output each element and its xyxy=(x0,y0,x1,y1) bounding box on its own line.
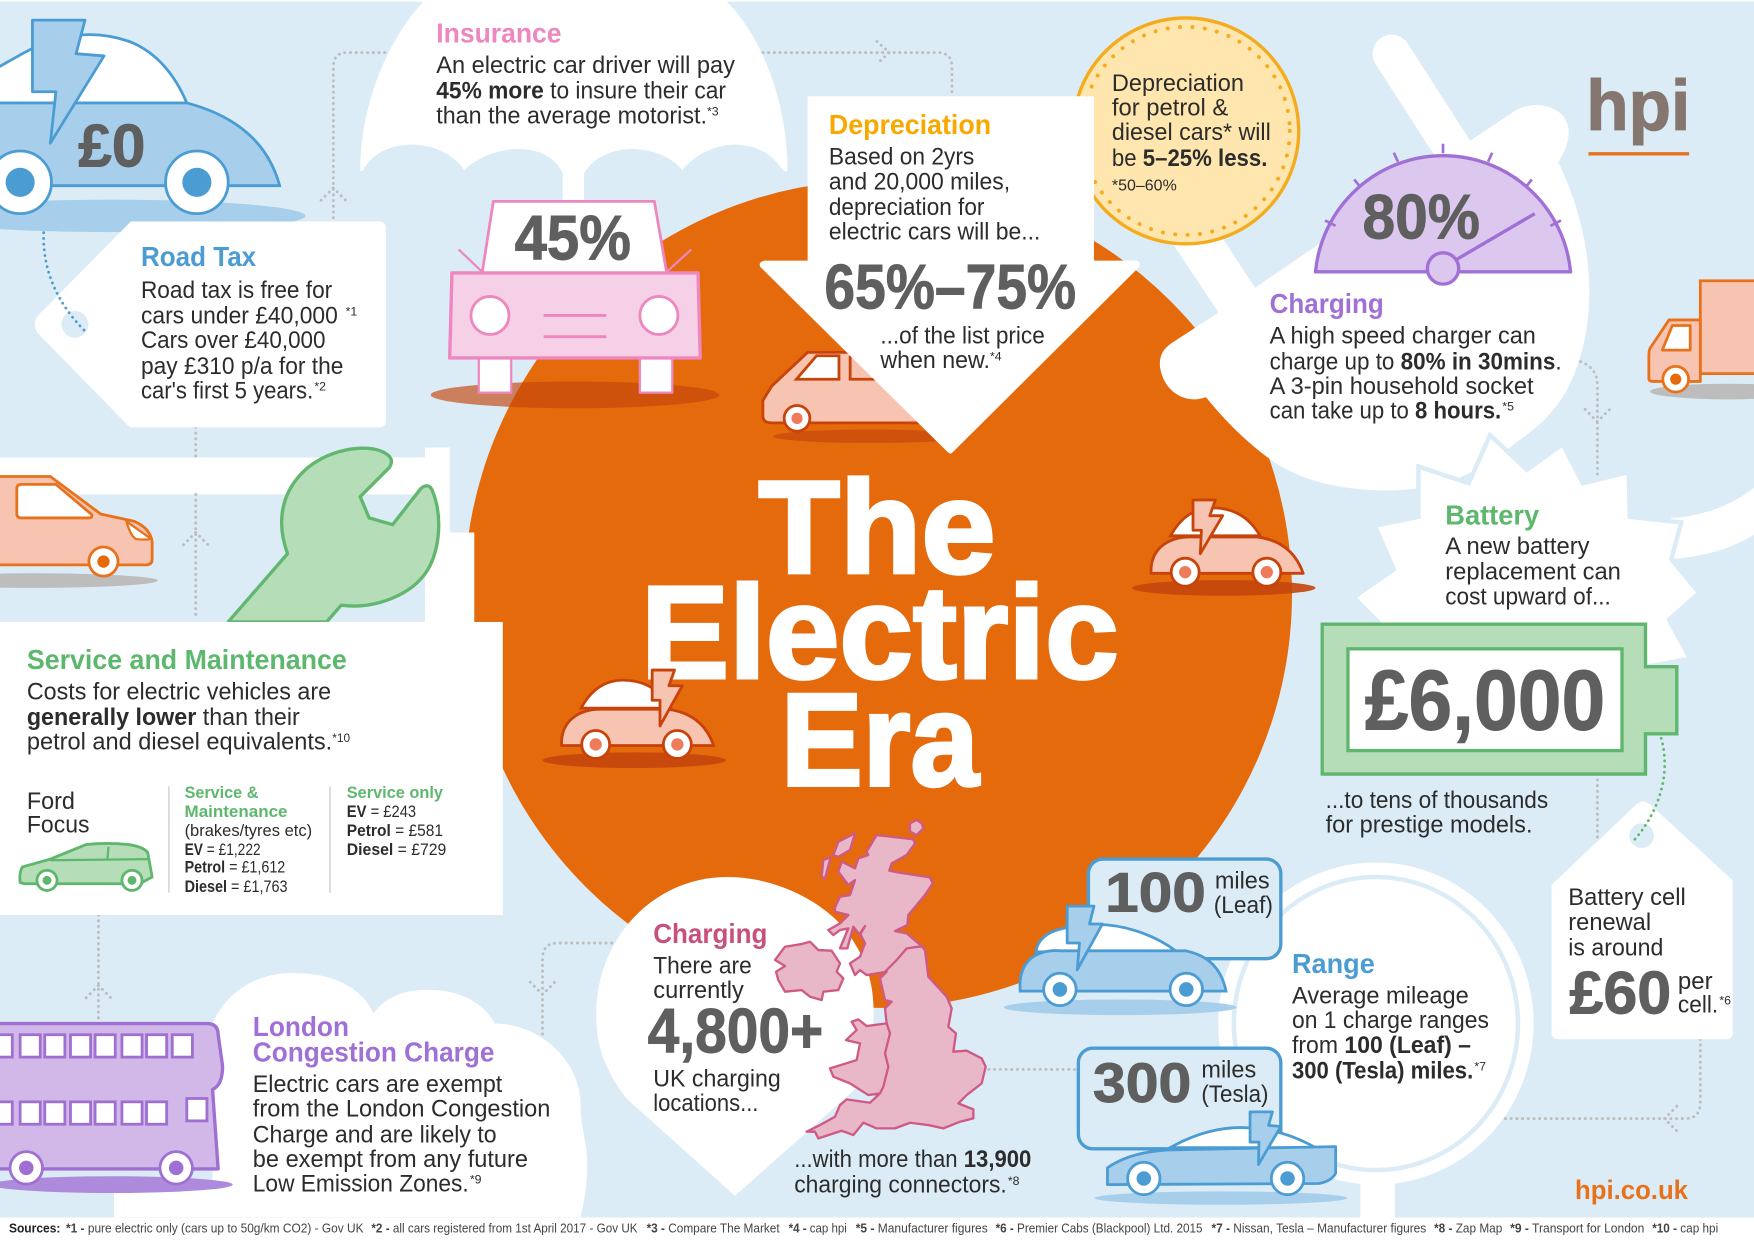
stat: 65-75 percent: 65%–75% xyxy=(824,253,1076,323)
panel: 300 miles bubble xyxy=(1078,1048,1281,1149)
text: insurance body: 45% more to insure their car xyxy=(436,78,726,105)
panel: road tax tag xyxy=(35,221,386,427)
connector: depreciation to charging xyxy=(1049,348,1163,373)
text: range body: on 1 charge ranges xyxy=(1292,1007,1489,1034)
heading: service and maintenance: Service and Maintenance xyxy=(27,644,347,675)
text: battery cell: per xyxy=(1678,968,1713,995)
dotted string xyxy=(44,233,85,331)
text: depreciation coin copy: diesel cars* will xyxy=(1112,119,1271,146)
text: range body: 300 (Tesla) miles. xyxy=(1292,1058,1473,1085)
connector: service to bus xyxy=(86,915,111,1025)
text: road tax body: car's first 5 years. xyxy=(141,377,313,404)
table: service and maintenance costs: Maintenance xyxy=(185,802,287,821)
panel: uk charging pin xyxy=(596,877,874,1196)
dotted string xyxy=(1633,738,1665,841)
connector: insurance to road tax xyxy=(321,53,385,219)
icon: pink car front: 45% xyxy=(515,204,631,274)
text: congestion body: from the London Congestion xyxy=(253,1096,550,1123)
text: ford focus xyxy=(27,788,89,838)
text: insurance body: than the average motorist. xyxy=(436,102,707,129)
text: locations: UK charging xyxy=(653,1065,781,1092)
sources: *3 - Compare The Market xyxy=(647,1221,780,1236)
panel: 100 miles bubble xyxy=(1088,859,1281,959)
text: road tax body: cars under £40,000 xyxy=(141,303,338,330)
text: road tax body xyxy=(141,277,357,404)
table: service and maintenance costs: Service & xyxy=(185,783,258,802)
text: of list price: when new. xyxy=(879,347,990,374)
icon: speedometer gauge xyxy=(1316,144,1571,284)
heading: insurance: Insurance xyxy=(436,18,562,49)
heading: range: Range xyxy=(1292,948,1375,979)
text: uk charging intro: There are xyxy=(653,952,752,979)
text: battery cell: Battery cell xyxy=(1568,884,1686,911)
panel: congestion cloud xyxy=(114,973,587,1217)
icon: purple bus xyxy=(0,1024,233,1193)
stat: 4800: 4,800+ xyxy=(648,997,823,1067)
panel: 100 miles bubble: miles xyxy=(1215,867,1270,894)
text: of list price: ...of the list price xyxy=(880,323,1045,350)
connector: insurance to depreciation xyxy=(763,41,952,98)
text: road tax body: *2 xyxy=(314,380,326,394)
heading: uk charging: Charging xyxy=(653,918,767,949)
connector: road tax to service xyxy=(183,427,208,620)
panel: range circle xyxy=(1218,862,1534,1219)
text: battery body xyxy=(1445,533,1621,610)
text: service summary: generally lower than their xyxy=(27,704,300,731)
text: battery cell xyxy=(1568,884,1731,1026)
text: congestion body: Low Emission Zones. xyxy=(253,1171,469,1198)
text: locations xyxy=(653,1065,781,1117)
connector: charging to battery xyxy=(1575,360,1610,841)
table: service only costs: Petrol = £581 xyxy=(347,821,443,840)
footer strip xyxy=(0,1218,1754,1240)
text: congestion body: Electric cars are exempt xyxy=(253,1071,503,1098)
text: depreciation coin copy: Depreciation xyxy=(1112,70,1244,97)
title circle xyxy=(464,180,1292,1008)
sources: *9 - Transport for London xyxy=(1510,1221,1644,1236)
text: battery body: A new battery xyxy=(1445,533,1590,560)
text: range body: *7 xyxy=(1474,1060,1486,1074)
text: battery cell: is around xyxy=(1568,935,1663,962)
panel: plug body xyxy=(1160,105,1589,490)
icon: pink car front xyxy=(431,201,719,408)
text: battery cell: £60 xyxy=(1569,958,1671,1026)
panel: depreciation coin xyxy=(1073,18,1299,244)
table: service only costs xyxy=(347,783,446,859)
text: of list price: *4 xyxy=(990,349,1002,363)
panel: 300 miles bubble: miles xyxy=(1201,1056,1256,1083)
icon: car on circle right xyxy=(1132,500,1316,596)
text: tens of thousands xyxy=(1326,787,1548,838)
text: battery cell: cell. xyxy=(1678,992,1718,1019)
text: range body xyxy=(1292,983,1489,1085)
icon: pink van behind arrow xyxy=(763,352,970,443)
text: battery cell: renewal xyxy=(1568,909,1651,936)
panel: 100 miles bubble: (Leaf) xyxy=(1214,892,1273,919)
text: congestion body: *9 xyxy=(470,1173,482,1187)
table: service and maintenance costs: Petrol = £1,612 xyxy=(185,858,285,877)
text: tens of thousands: ...to tens of thousands xyxy=(1326,787,1548,814)
text: service summary: *10 xyxy=(332,731,350,745)
sources: *10 - cap hpi xyxy=(1652,1221,1718,1236)
house interior xyxy=(0,494,425,622)
sources: *6 - Premier Cabs (Blackpool) Ltd. 2015 xyxy=(996,1221,1203,1236)
text: charging speed body: *5 xyxy=(1502,400,1514,414)
text: service summary: petrol and diesel equivalents. xyxy=(27,729,332,756)
table: service and maintenance costs xyxy=(185,783,312,896)
panel: battery starburst xyxy=(1354,435,1699,671)
text: ford focus: Ford xyxy=(27,788,75,815)
text: charging speed body: A high speed charger can xyxy=(1270,323,1536,350)
text: depreciation coin copy: *50–60% xyxy=(1112,177,1177,194)
panel: service and maintenance xyxy=(0,622,503,915)
icon: battery with price xyxy=(1322,624,1677,774)
text: battery body: replacement can xyxy=(1445,559,1621,586)
heading: congestion charge: Congestion Charge xyxy=(253,1037,494,1068)
heading: battery: Battery xyxy=(1445,500,1540,531)
table: service only costs: Diesel = £729 xyxy=(347,840,446,859)
house outline band behind wrench xyxy=(0,447,474,626)
text: depreciation coin copy xyxy=(1112,70,1271,194)
panel: road tax car: £0 xyxy=(78,112,145,180)
text: insurance body xyxy=(436,52,735,129)
house right wall xyxy=(425,447,474,626)
text: charging connectors xyxy=(794,1146,1031,1199)
text: charging speed body: can take up to 8 hours. xyxy=(1270,398,1501,425)
icon: tesla car xyxy=(1095,1112,1347,1205)
text: range body: from 100 (Leaf) – xyxy=(1292,1032,1471,1059)
text: uk charging intro: currently xyxy=(653,977,744,1004)
title: The xyxy=(758,454,996,601)
text: depreciation coin copy: be 5–25% less. xyxy=(1112,145,1267,172)
title xyxy=(641,454,1119,813)
sources: *5 - Manufacturer figures xyxy=(856,1221,988,1236)
icon: wrench xyxy=(228,448,439,622)
icon: van left xyxy=(0,477,158,588)
panel: 300 miles bubble: 300 xyxy=(1093,1051,1191,1114)
logo: hpi: hpi xyxy=(1586,66,1690,146)
text: charging connectors: ...with more than 13,900 xyxy=(794,1146,1031,1173)
icon: green car xyxy=(20,843,152,890)
panel: road tax car xyxy=(0,20,305,232)
text: charging speed body xyxy=(1270,323,1562,425)
table: service only costs: Service only xyxy=(347,783,444,802)
text: battery cell: *6 xyxy=(1719,994,1731,1008)
sources: *4 - cap hpi xyxy=(789,1221,847,1236)
icon: car on circle left xyxy=(543,670,726,768)
text: road tax body: *1 xyxy=(346,305,357,319)
icon: battery with price: £6,000 xyxy=(1365,653,1605,748)
panel: insurance umbrella xyxy=(360,0,788,208)
connector: battery cell to range xyxy=(1499,1039,1700,1131)
table: service and maintenance costs: Diesel = £1,763 xyxy=(185,877,287,896)
text: of list price xyxy=(879,323,1045,374)
text: locations: locations... xyxy=(653,1090,758,1117)
text: service summary: Costs for electric vehicles are xyxy=(27,678,331,705)
text: depreciation coin copy: for petrol & xyxy=(1112,94,1228,121)
panel: battery cell tag xyxy=(1552,738,1733,1039)
connector: uk charging to congestion xyxy=(530,943,617,1035)
text: charging connectors: charging connectors. xyxy=(794,1172,1007,1199)
table: service and maintenance costs: EV = £1,222 xyxy=(185,840,261,859)
text: road tax body: Cars over £40,000 xyxy=(141,327,326,354)
plug prong upper xyxy=(1392,54,1454,151)
heading: congestion charge: London xyxy=(253,1011,349,1042)
table: service only costs: EV = £243 xyxy=(347,802,416,821)
text: congestion body: Charge and are likely to xyxy=(253,1121,497,1148)
text: insurance body: An electric car driver will pay xyxy=(436,52,735,79)
panel: 300 miles bubble: (Tesla) xyxy=(1201,1081,1269,1108)
text: uk charging intro xyxy=(653,952,752,1004)
icon: truck right xyxy=(1649,281,1754,399)
panel: depreciation arrow xyxy=(760,96,1140,454)
text: battery body: cost upward of... xyxy=(1445,583,1611,610)
panel: 100 miles bubble: 100 xyxy=(1105,861,1206,924)
text: depreciation body: and 20,000 miles, xyxy=(829,168,1010,195)
sources: Sources: xyxy=(9,1221,60,1236)
text: depreciation body: depreciation for xyxy=(829,194,984,221)
icon: leaf car xyxy=(1004,906,1237,1015)
text: ford focus: Focus xyxy=(27,811,89,838)
text: charging connectors: *8 xyxy=(1008,1174,1020,1188)
text: charging speed body: charge up to 80% in 30mins. xyxy=(1270,348,1562,375)
table: service and maintenance costs: (brakes/tyres etc) xyxy=(185,821,312,840)
sources xyxy=(9,1221,1718,1236)
plug prong lower xyxy=(1152,213,1258,319)
heading: road tax: Road Tax xyxy=(141,241,257,272)
text: road tax body: Road tax is free for xyxy=(141,277,332,304)
title: Electric xyxy=(641,559,1119,706)
text: service summary xyxy=(27,678,350,756)
text: charging speed body: A 3-pin household socket xyxy=(1270,373,1534,400)
icon: speedometer gauge: 80% xyxy=(1362,182,1480,252)
text: congestion body xyxy=(253,1071,550,1198)
text: depreciation body: Based on 2yrs xyxy=(829,144,974,171)
sources: *2 - all cars registered from 1st April 2017 - Gov UK xyxy=(371,1221,638,1236)
text: range body: Average mileage xyxy=(1292,983,1469,1010)
heading: charging speed: Charging xyxy=(1270,288,1384,319)
cable from plug xyxy=(1667,488,1754,559)
text: insurance body: *3 xyxy=(707,104,719,118)
sources: *1 - pure electric only (cars up to 50g/km CO2) - Gov UK xyxy=(66,1221,364,1236)
text: road tax body: pay £310 p/a for the xyxy=(141,353,343,380)
sources: *7 - Nissan, Tesla – Manufacturer figures xyxy=(1211,1221,1426,1236)
text: congestion body: be exempt from any future xyxy=(253,1146,528,1173)
connector: map to range xyxy=(989,1068,1081,1071)
heading: depreciation: Depreciation xyxy=(829,109,991,140)
text: tens of thousands: for prestige models. xyxy=(1326,811,1533,838)
text: depreciation body xyxy=(829,144,1040,246)
sources: *8 - Zap Map xyxy=(1434,1221,1502,1236)
title: Era xyxy=(781,666,980,813)
website url: hpi.co.uk xyxy=(1575,1175,1688,1205)
map: united kingdom xyxy=(775,820,986,1138)
text: depreciation body: electric cars will be... xyxy=(829,219,1040,246)
heading: congestion charge xyxy=(253,1011,494,1068)
